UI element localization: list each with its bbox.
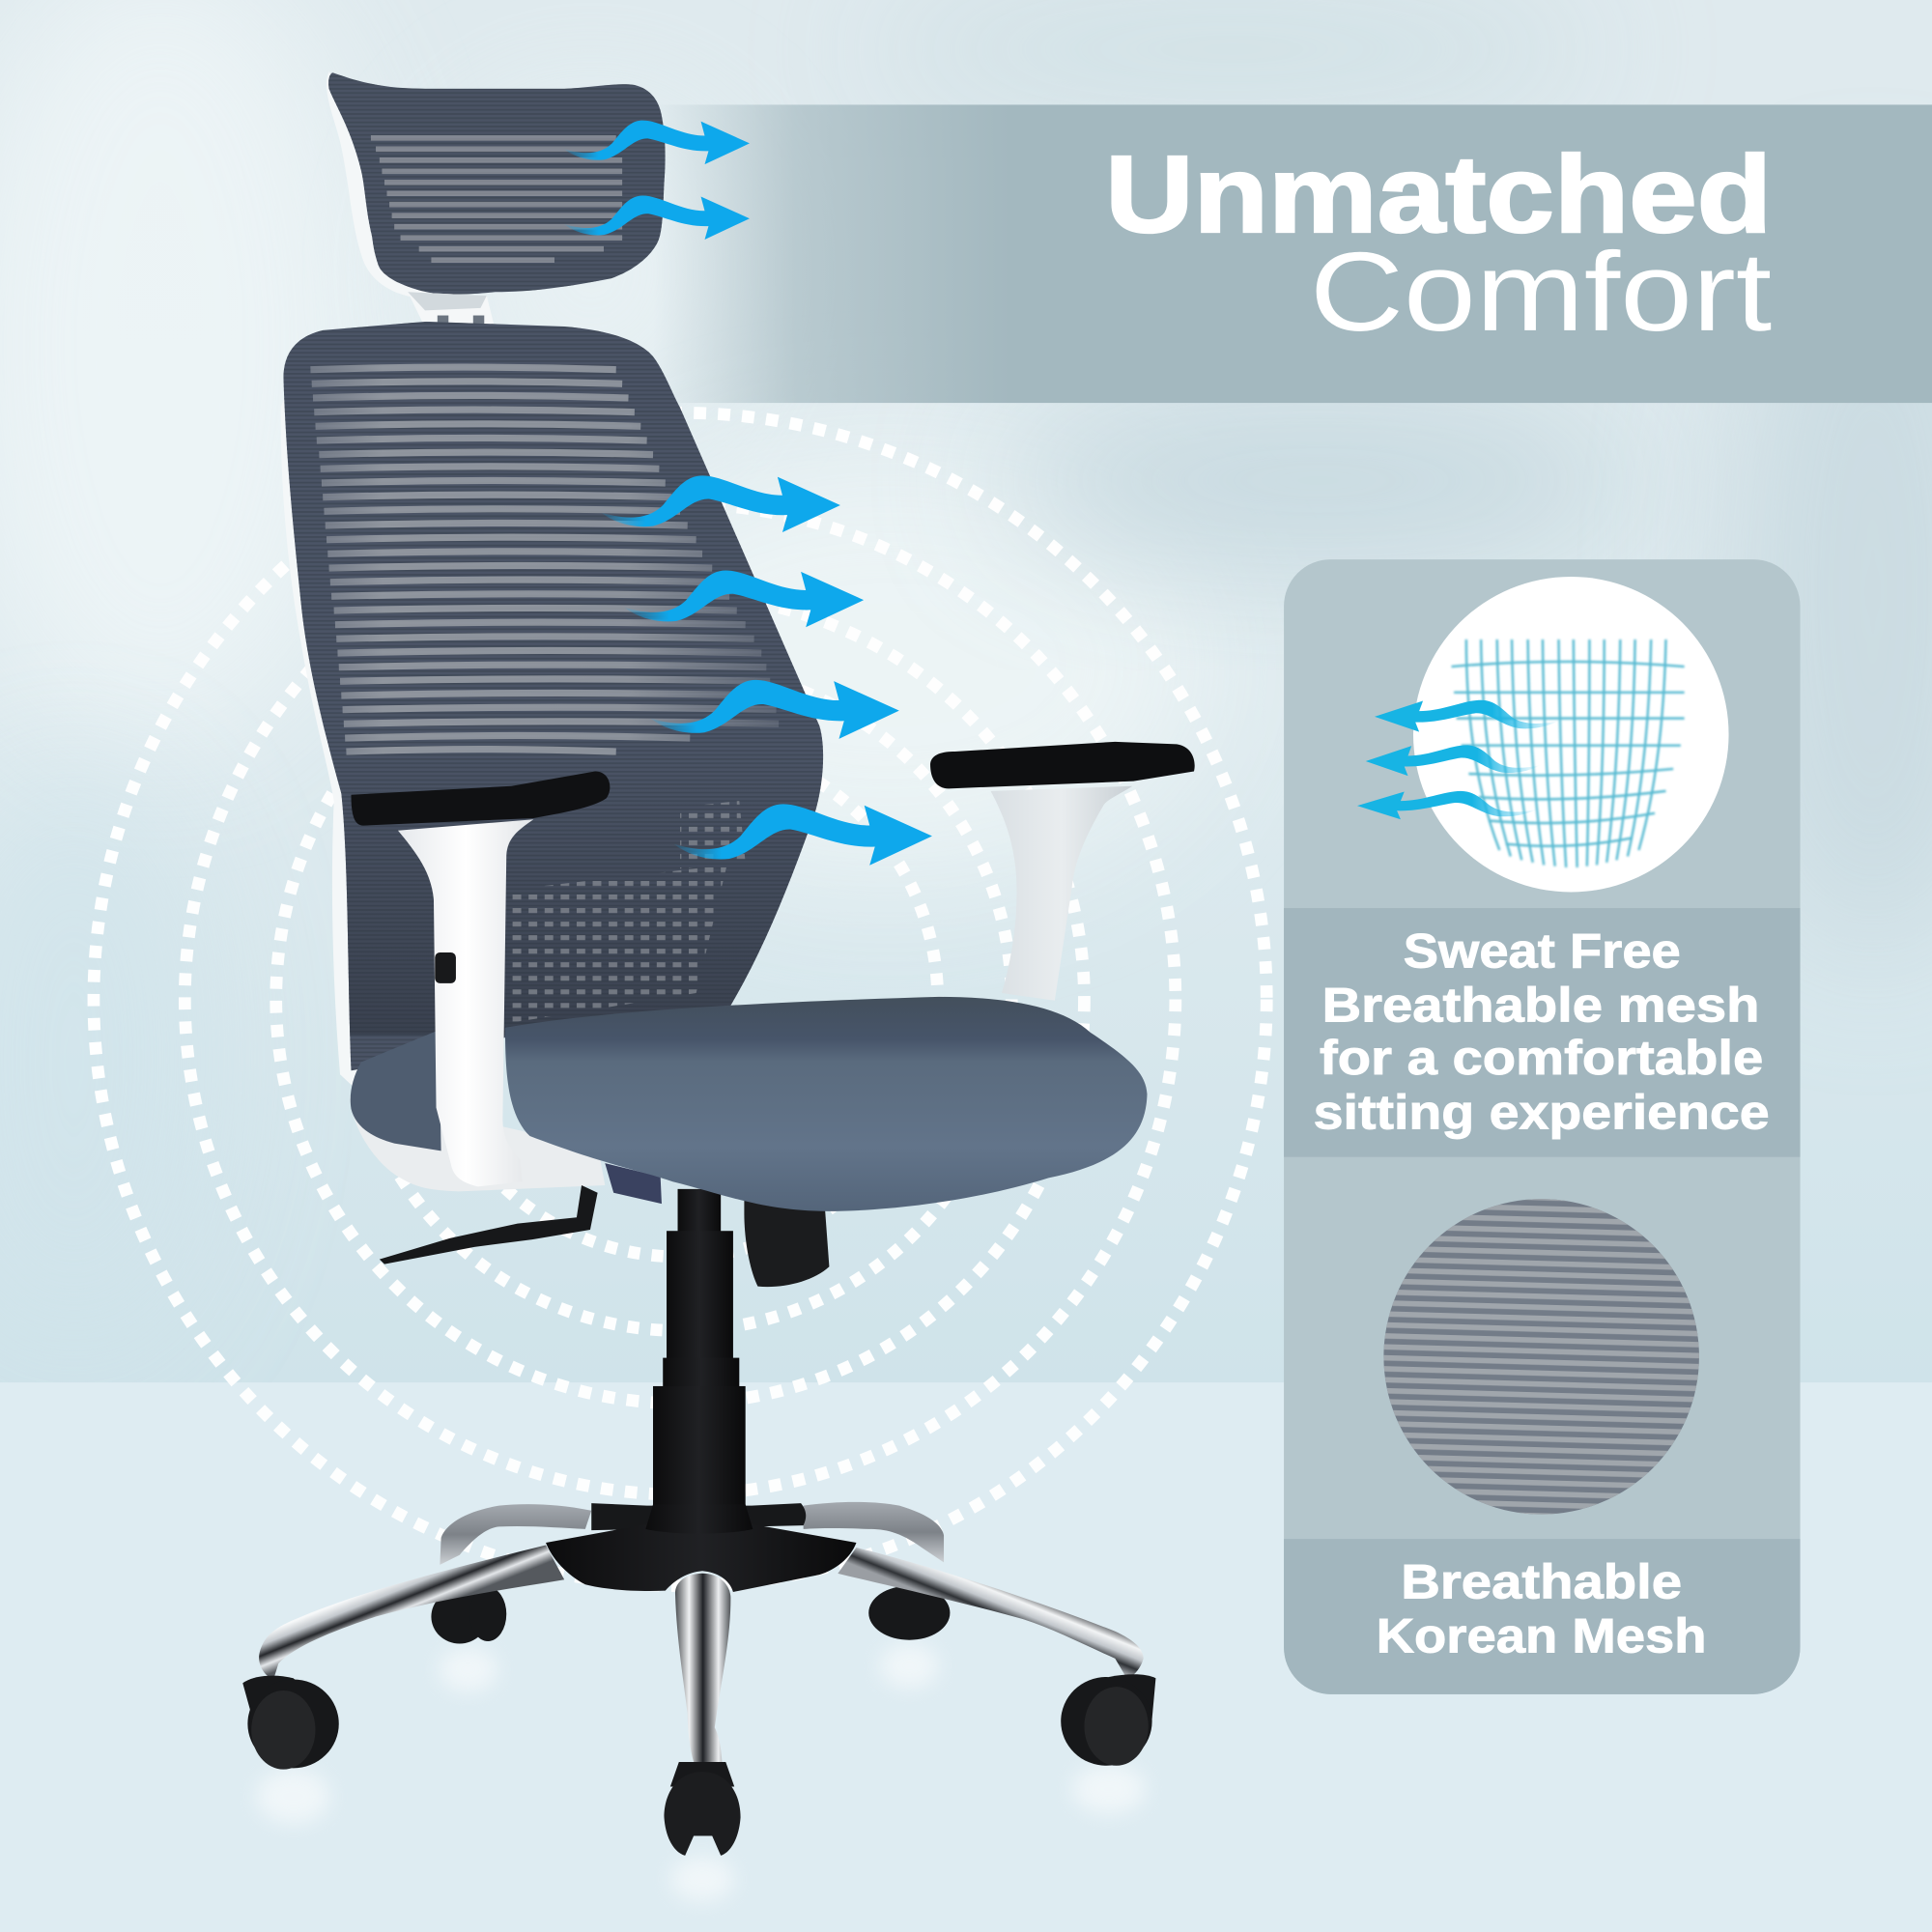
airflow arrow 2 (564, 195, 750, 240)
title (1105, 133, 1772, 355)
chair: headrest (321, 68, 678, 301)
text block: breathable korean mesh (1377, 1554, 1707, 1662)
airflow arrow 3 (601, 475, 840, 532)
title: Comfort (1310, 229, 1772, 355)
chair: tension knob (744, 1182, 829, 1287)
caster: left (242, 1676, 339, 1770)
chair: right arm post (991, 786, 1132, 1001)
chair: rear casters (431, 1586, 950, 1644)
title: Unmatched (1105, 133, 1772, 256)
chair: left arm button (435, 952, 456, 983)
backrest stripes (310, 367, 779, 752)
chair: front centre leg (675, 1574, 730, 1762)
background wall (0, 0, 1932, 1386)
chair: front right leg (838, 1548, 1144, 1680)
chair: hub (546, 1524, 856, 1592)
chair: left arm post (398, 819, 533, 1186)
backrest lower shading (344, 827, 807, 1036)
icon: outgoing airflow arrows (1357, 700, 1559, 819)
floor (0, 1382, 1932, 1932)
icon: white mesh circle (1413, 577, 1729, 892)
panel: features (1284, 559, 1801, 1694)
chair: front casters (242, 1674, 1155, 1856)
text band: sweat free (1284, 908, 1801, 1157)
text block: sweat free breathable mesh: Sweat Free (1404, 923, 1681, 978)
chair: gas lift cylinder (645, 1189, 753, 1534)
chair: brand label (605, 1163, 662, 1204)
chair: rear base legs (440, 1502, 944, 1565)
backrest lower vent dots (511, 865, 727, 1023)
chair: headrest connector (408, 292, 496, 330)
floor reflections under casters (256, 1644, 1146, 1901)
airflow arrow 6 (674, 804, 932, 866)
airflow arrow 4 (625, 571, 864, 627)
dotted concentric rings (94, 412, 1266, 1586)
text block: breathable korean mesh: Breathable (1401, 1554, 1682, 1608)
chair: tilt lever (380, 1185, 598, 1264)
chair: seat rear section (351, 1030, 441, 1151)
headrest white frame (327, 71, 456, 298)
chair: seat cushion (505, 997, 1148, 1211)
caster: right (1061, 1674, 1155, 1766)
chair: left armrest pad (352, 771, 610, 826)
airflow arrow 5 (650, 680, 899, 739)
text block: sweat free breathable mesh (1314, 923, 1770, 1139)
text block: sweat free breathable mesh: sitting experience (1314, 1085, 1770, 1139)
icon: mesh grid (1452, 639, 1685, 867)
chair: backrest white frame (281, 394, 357, 1091)
text block: sweat free breathable mesh: Breathable mesh (1322, 978, 1759, 1032)
header banner (653, 104, 1932, 403)
chair: front left leg (259, 1545, 564, 1680)
chair: right armrest pad (930, 742, 1195, 788)
text block: breathable korean mesh: Korean Mesh (1377, 1608, 1707, 1662)
icon: mesh fabric swatch (1380, 1195, 1705, 1520)
airflow arrow 1 (564, 121, 750, 164)
caster: centre (665, 1762, 741, 1856)
text band: korean mesh (1284, 1539, 1801, 1694)
headrest mesh (328, 72, 666, 295)
text block: sweat free breathable mesh: for a comfortable (1320, 1031, 1763, 1085)
panel background (1284, 559, 1801, 1694)
chair: rear hub stubs (591, 1503, 806, 1530)
office chair (242, 68, 1195, 1856)
chair: white lower shell (350, 1096, 605, 1191)
chair: backrest mesh (277, 314, 832, 1078)
